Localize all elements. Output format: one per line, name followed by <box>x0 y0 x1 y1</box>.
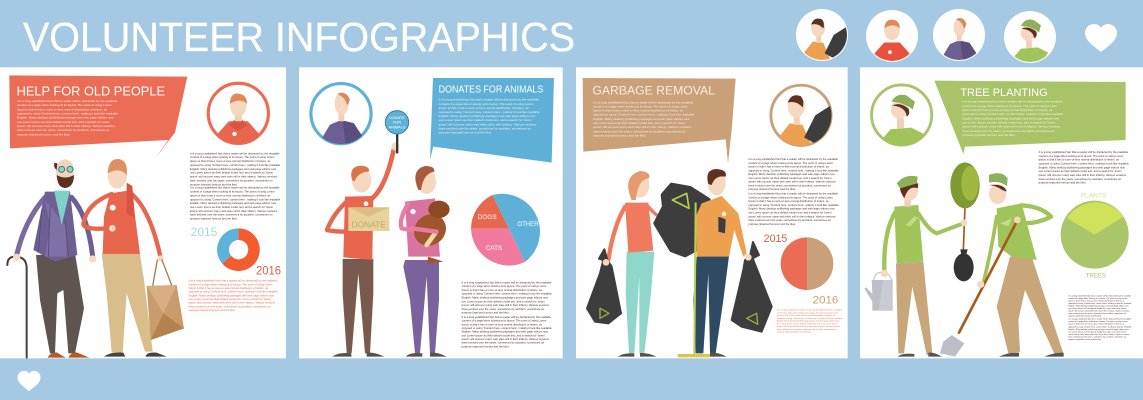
text block: purpose (injected humour and the like). <box>748 222 796 226</box>
speech banner <box>934 81 1126 154</box>
text block: English. Many desktop publishing packages and web page editors now <box>190 201 276 205</box>
text block: purpose (injected humour and the like). <box>462 311 510 315</box>
sign: donate for animals: ANIMALS <box>389 125 406 129</box>
text block: purpose (injected humour and the like). <box>190 217 238 221</box>
figure: woman with dog <box>401 166 452 357</box>
panel: garbage removal <box>576 67 848 358</box>
banner text: purpose (injected humour and the like). <box>439 130 492 134</box>
red text block: use Lorem Ipsum as their default model text, and a search for 'lorem <box>189 297 272 301</box>
banner text: content of a page when looking at its layout. The point of using Lorem <box>962 104 1058 108</box>
text block: have evolved over the years, sometimes by accident, sometimes on <box>748 183 831 187</box>
small text block: English. Many desktop publishing packages and web page editors now <box>1068 328 1129 331</box>
red text block: ipsum' will uncover many web sites still in their infancy. Various versions <box>777 325 840 328</box>
banner text: use Lorem Ipsum as their default model text, and a search for 'lorem <box>593 121 686 125</box>
small text block: content of a page when looking at its layout. The point of using Lorem <box>1068 320 1128 323</box>
panel: donates for animals <box>299 67 563 358</box>
icon: watering can <box>864 272 893 311</box>
text block: English. Many desktop publishing packages and web page editors now <box>1039 165 1125 169</box>
red text block: use Lorem Ipsum as their default model text, and a search for 'lorem <box>777 322 837 325</box>
text block: have evolved over the years, sometimes by accident, sometimes on <box>1039 177 1122 181</box>
text block: use Lorem Ipsum as their default model text, and a search for 'lorem <box>462 299 545 303</box>
banner text: content of a page when looking at its layout. The point of using Lorem <box>593 104 688 108</box>
text block: It is a long established fact that a reader will be distracted by the readable <box>748 157 838 161</box>
small text block: opposed to using 'Content here, content here', making it look like readable <box>1068 302 1131 305</box>
text block: use Lorem Ipsum as their default model text, and a search for 'lorem <box>190 171 274 175</box>
red text block: opposed to using 'Content here, content here', making it look like readable <box>189 290 278 294</box>
avatar ring <box>872 85 932 147</box>
text block: It is a long established fact that a reader will be distracted by the readable <box>1039 150 1129 154</box>
text block: Ipsum is that it has a more-or-less normal distribution of letters, as <box>462 288 543 292</box>
text block: opposed to using 'Content here, content here', making it look like readable <box>462 292 552 296</box>
text block: content of a page when looking at its layout. The point of using Lorem <box>1039 154 1124 158</box>
banner text: English. Many desktop publishing packages and web page editors now <box>593 117 690 121</box>
pie label plants: PLANTS <box>1081 193 1106 200</box>
red text block: English. Many desktop publishing packages and web page editors now <box>777 320 840 323</box>
pie label other: OTHER <box>517 221 539 228</box>
avatar row <box>796 9 1056 63</box>
text block: Ipsum is that it has a more-or-less normal distribution of letters, as <box>190 193 271 197</box>
small text block: use Lorem Ipsum as their default model text, and a search for 'lorem <box>1068 307 1127 310</box>
banner text: have evolved over the years, sometimes by accident, sometimes on <box>593 129 686 133</box>
panel: help for old people <box>0 67 286 358</box>
figure: volunteer with shovel <box>940 173 1064 357</box>
banner text: use Lorem Ipsum as their default model text, and a search for 'lorem <box>17 120 110 124</box>
speech banner <box>9 75 187 159</box>
red text block: have evolved over the years, sometimes by accident, sometimes on <box>189 304 271 308</box>
banner text: It is a long established fact that a reader will be distracted by the readable <box>439 98 539 102</box>
text block: content of a page when looking at its layout. The point of using Lorem <box>748 195 834 199</box>
avatar ring <box>208 83 268 145</box>
red text block: have evolved over the years, sometimes by accident, sometimes on <box>777 328 837 331</box>
heading: GARBAGE REMOVAL <box>592 83 715 97</box>
text block: have evolved over the years, sometimes by accident, sometimes on <box>462 341 545 345</box>
red text block: It is a long established fact that a reader will be distracted by the readable <box>777 309 843 312</box>
small text block: Ipsum is that it has a more-or-less normal distribution of letters, as <box>1068 323 1125 326</box>
text block: content of a page when looking at its layout. The point of using Lorem <box>462 284 547 288</box>
red text block: opposed to using 'Content here, content here', making it look like readable <box>777 317 843 320</box>
sign: donate for animals: FOR <box>393 121 401 125</box>
text block: It is a long established fact that a reader will be distracted by the readable <box>190 186 280 190</box>
red text block: content of a page when looking at its layout. The point of using Lorem <box>777 311 838 314</box>
figure: man with big bag and broom <box>656 169 772 357</box>
text block: Ipsum is that it has a more-or-less normal distribution of letters, as <box>748 165 829 169</box>
banner text: English. Many desktop publishing packages and web page editors now <box>962 116 1060 120</box>
pie label dogs: DOGS <box>478 214 497 221</box>
small text block: use Lorem Ipsum as their default model text, and a search for 'lorem <box>1068 330 1127 333</box>
figure: woman with bags <box>587 171 693 357</box>
year label 2015: 2015 <box>764 233 787 245</box>
year label 2016: 2016 <box>256 263 281 277</box>
text block: ipsum' will uncover many web sites still in their infancy. Various versions <box>190 209 278 213</box>
text block: Ipsum is that it has a more-or-less normal distribution of letters, as <box>1039 158 1120 162</box>
text block: have evolved over the years, sometimes by accident, sometimes on <box>462 307 545 311</box>
text block: English. Many desktop publishing packages and web page editors now <box>462 330 548 334</box>
text block: English. Many desktop publishing packages and web page editors now <box>190 167 276 171</box>
icon: heart top <box>1085 24 1117 52</box>
banner text: English. Many desktop publishing packages and web page editors now <box>439 114 536 118</box>
red text block: purpose (injected humour and the like). <box>777 331 812 334</box>
banner text: Ipsum is that it has a more-or-less normal distribution of letters, as <box>439 106 529 110</box>
figure: young volunteer with bag <box>83 159 184 357</box>
text block: English. Many desktop publishing packages and web page editors now <box>748 172 835 176</box>
text block: It is a long established fact that a reader will be distracted by the readable <box>462 280 552 284</box>
avatar: red volunteer <box>866 10 918 62</box>
small text block: ipsum' will uncover many web sites still in their infancy. Various versions <box>1068 310 1129 313</box>
text block: ipsum' will uncover many web sites still in their infancy. Various versions <box>748 180 836 184</box>
text block: use Lorem Ipsum as their default model text, and a search for 'lorem <box>748 176 832 180</box>
pie chart <box>781 237 833 290</box>
small text block: purpose (injected humour and the like). <box>1068 315 1102 318</box>
banner text: content of a page when looking at its layout. The point of using Lorem <box>439 102 534 106</box>
text block: use Lorem Ipsum as their default model text, and a search for 'lorem <box>1039 169 1122 173</box>
banner text: have evolved over the years, sometimes by accident, sometimes on <box>17 128 110 132</box>
icon: heart bottom <box>17 371 41 391</box>
avatar: garbage volunteer <box>796 9 848 61</box>
heading: TREE PLANTING <box>960 87 1048 99</box>
heading: HELP FOR OLD PEOPLE <box>17 84 165 99</box>
small text block: have evolved over the years, sometimes by accident, sometimes on <box>1068 335 1126 338</box>
pie label cats: CATS <box>486 245 503 252</box>
text block: purpose (injected humour and the like). <box>748 187 796 191</box>
red text block: ipsum' will uncover many web sites still in their infancy. Various versions <box>189 301 276 305</box>
text block: Ipsum is that it has a more-or-less normal distribution of letters, as <box>190 159 271 163</box>
banner text: opposed to using 'Content here, content here', making it look like readable <box>593 113 694 117</box>
text block: opposed to using 'Content here, content here', making it look like readable <box>748 203 839 207</box>
figure: volunteer with tree <box>881 162 980 357</box>
title: VOLUNTEER INFOGRAPHICS <box>23 14 575 60</box>
avatar: purple volunteer <box>933 9 985 61</box>
banner text: It is a long established fact that a reader will be distracted by the readable <box>962 100 1063 104</box>
banner text: Ipsum is that it has a more-or-less normal distribution of letters, as <box>593 109 683 113</box>
red text block: English. Many desktop publishing packages and web page editors now <box>189 293 274 297</box>
banner text: have evolved over the years, sometimes by accident, sometimes on <box>439 126 531 130</box>
text block: content of a page when looking at its layout. The point of using Lorem <box>190 190 275 194</box>
banner text: ipsum' will uncover many web sites still in their infancy. Various versions <box>962 125 1061 129</box>
banner text: ipsum' will uncover many web sites still in their infancy. Various versions <box>593 125 691 129</box>
banner text: purpose (injected humour and the like). <box>17 132 71 136</box>
small text block: opposed to using 'Content here, content here', making it look like readable <box>1068 325 1131 328</box>
text block: use Lorem Ipsum as their default model text, and a search for 'lorem <box>190 205 274 209</box>
text block: Ipsum is that it has a more-or-less normal distribution of letters, as <box>748 199 829 203</box>
text block: use Lorem Ipsum as their default model text, and a search for 'lorem <box>748 210 832 214</box>
banner text: use Lorem Ipsum as their default model text, and a search for 'lorem <box>439 118 532 122</box>
red text block: Ipsum is that it has a more-or-less normal distribution of letters, as <box>777 314 835 317</box>
small text block: Ipsum is that it has a more-or-less normal distribution of letters, as <box>1068 299 1125 302</box>
donut chart <box>217 228 260 271</box>
text block: purpose (injected humour and the like). <box>462 344 510 348</box>
banner text: purpose (injected humour and the like). <box>593 133 647 137</box>
figure: old man with cane <box>7 159 96 358</box>
year label 2016: 2016 <box>813 294 838 306</box>
text block: content of a page when looking at its layout. The point of using Lorem <box>748 161 834 165</box>
banner text: opposed to using 'Content here, content here', making it look like readable <box>439 110 540 114</box>
banner text: ipsum' will uncover many web sites still in their infancy. Various versions <box>17 124 115 128</box>
text block: opposed to using 'Content here, content here', making it look like readable <box>462 326 552 330</box>
text block: have evolved over the years, sometimes by accident, sometimes on <box>190 213 273 217</box>
figure: man with donate box: DONATE <box>352 220 386 230</box>
panel: tree planting <box>860 67 1143 358</box>
banner text: ipsum' will uncover many web sites still in their infancy. Various versions <box>439 122 537 126</box>
banner text: have evolved over the years, sometimes by accident, sometimes on <box>962 129 1055 133</box>
red text block: purpose (injected humour and the like). <box>189 308 236 312</box>
text block: have evolved over the years, sometimes by accident, sometimes on <box>190 178 273 182</box>
sign: donate for animals <box>385 111 409 153</box>
text block: ipsum' will uncover many web sites still in their infancy. Various versions <box>1039 173 1127 177</box>
banner text: use Lorem Ipsum as their default model text, and a search for 'lorem <box>962 120 1056 124</box>
banner text: opposed to using 'Content here, content here', making it look like readable <box>17 111 118 115</box>
text block: content of a page when looking at its layout. The point of using Lorem <box>462 319 547 323</box>
text block: English. Many desktop publishing packages and web page editors now <box>462 296 548 300</box>
banner text: content of a page when looking at its layout. The point of using Lorem <box>17 103 112 107</box>
avatar ring <box>771 85 833 147</box>
text block: ipsum' will uncover many web sites still in their infancy. Various versions <box>190 175 278 179</box>
text block: Ipsum is that it has a more-or-less normal distribution of letters, as <box>462 322 543 326</box>
text block: have evolved over the years, sometimes by accident, sometimes on <box>748 218 831 222</box>
text block: It is a long established fact that a reader will be distracted by the readable <box>748 192 838 196</box>
red text block: content of a page when looking at its layout. The point of using Lorem <box>189 282 273 286</box>
figure: man with donate box <box>327 143 399 357</box>
year label 2015: 2015 <box>191 225 217 239</box>
small text block: It is a long established fact that a reader will be distracted by the readable <box>1068 318 1131 321</box>
pie chart <box>1061 201 1129 269</box>
speech banner <box>430 78 554 163</box>
text block: opposed to using 'Content here, content here', making it look like readable <box>1039 161 1129 165</box>
text block: purpose (injected humour and the like). <box>1039 181 1087 185</box>
text block: It is a long established fact that a reader will be distracted by the readable <box>190 151 280 155</box>
banner text: purpose (injected humour and the like). <box>962 133 1016 137</box>
text block: use Lorem Ipsum as their default model text, and a search for 'lorem <box>462 333 545 337</box>
text block: purpose (injected humour and the like). <box>190 182 238 186</box>
red text block: Ipsum is that it has a more-or-less normal distribution of letters, as <box>189 286 269 290</box>
text block: opposed to using 'Content here, content here', making it look like readable <box>190 163 281 167</box>
banner text: It is a long established fact that a reader will be distracted by the readable <box>593 100 694 104</box>
sign: donate for animals: DONATE <box>389 116 405 120</box>
speech banner <box>583 78 736 163</box>
pie label trees: TREES <box>1086 272 1106 279</box>
avatar: green volunteer <box>1004 11 1056 63</box>
small text block: purpose (injected humour and the like). <box>1068 338 1102 341</box>
small text block: content of a page when looking at its layout. The point of using Lorem <box>1068 297 1128 300</box>
small text block: have evolved over the years, sometimes by accident, sometimes on <box>1068 312 1126 315</box>
text block: opposed to using 'Content here, content here', making it look like readable <box>190 197 281 201</box>
heading: DONATES FOR ANIMALS <box>439 85 543 96</box>
text block: opposed to using 'Content here, content here', making it look like readable <box>748 168 839 172</box>
text block: ipsum' will uncover many web sites still in their infancy. Various versions <box>748 214 836 218</box>
red text block: It is a long established fact that a reader will be distracted by the readable <box>189 279 278 283</box>
banner text: Ipsum is that it has a more-or-less normal distribution of letters, as <box>962 108 1053 112</box>
banner text: English. Many desktop publishing packages and web page editors now <box>17 116 114 120</box>
text block: It is a long established fact that a reader will be distracted by the readable <box>462 315 552 319</box>
banner text: Ipsum is that it has a more-or-less normal distribution of letters, as <box>17 107 107 111</box>
banner text: opposed to using 'Content here, content here', making it look like readable <box>962 112 1064 116</box>
text block: ipsum' will uncover many web sites still in their infancy. Various versions <box>462 337 550 341</box>
text block: content of a page when looking at its layout. The point of using Lorem <box>190 155 275 159</box>
small text block: English. Many desktop publishing packages and web page editors now <box>1068 304 1129 307</box>
text block: ipsum' will uncover many web sites still in their infancy. Various versions <box>462 303 550 307</box>
small text block: ipsum' will uncover many web sites still in their infancy. Various versions <box>1068 333 1129 336</box>
banner text: It is a long established fact that a reader will be distracted by the readable <box>17 99 118 103</box>
text block: English. Many desktop publishing packages and web page editors now <box>748 207 835 211</box>
pie chart <box>471 194 540 266</box>
avatar ring <box>311 84 371 145</box>
small text block: It is a long established fact that a reader will be distracted by the readable <box>1068 294 1131 297</box>
